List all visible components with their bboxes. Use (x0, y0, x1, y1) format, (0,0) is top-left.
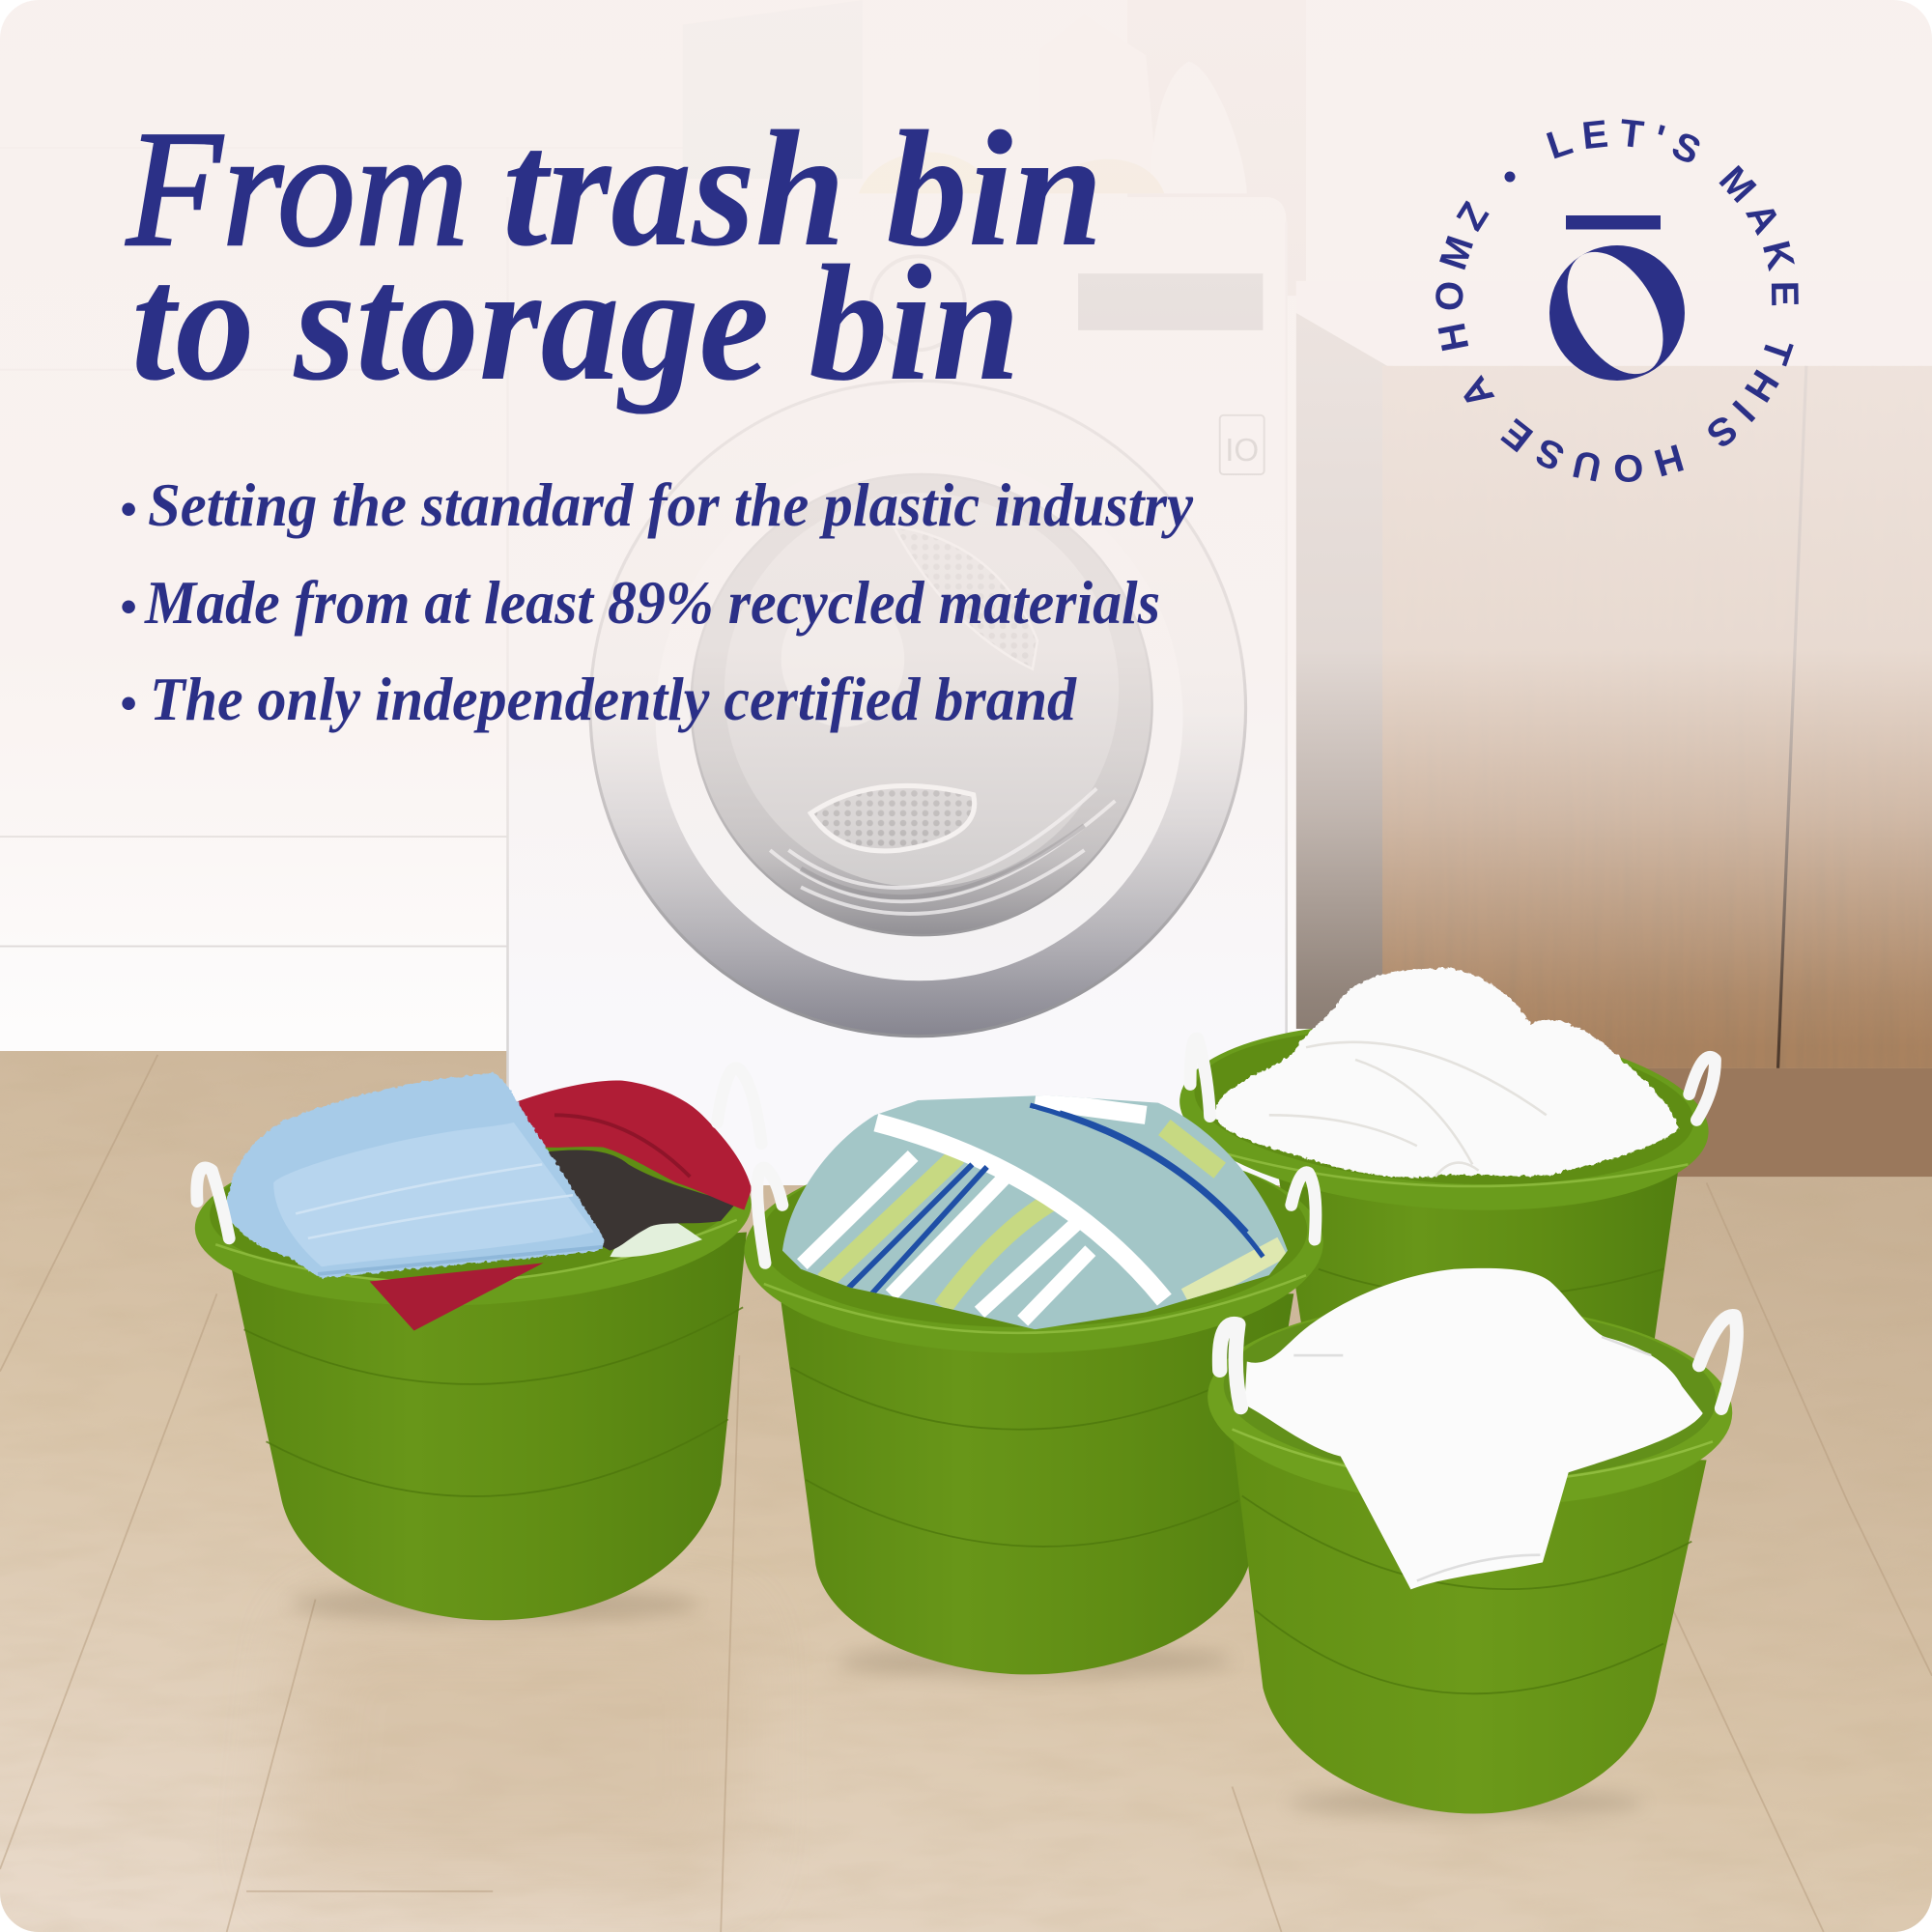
bin rim (743, 1136, 1325, 1358)
bin: front right with white cloth (1205, 1268, 1737, 1814)
floor grain (44, 1924, 72, 1932)
white cloth (1244, 1268, 1703, 1589)
lower drum paddle (810, 785, 975, 851)
drum hub (784, 678, 900, 726)
title: trash bin (502, 98, 1103, 281)
bin: left with blue towel and red cloth (191, 1068, 761, 1620)
bullet: recycled: Made from at least 89% recycled materials (144, 568, 1160, 637)
red cloth (514, 1081, 752, 1210)
rope handles (1190, 1038, 1210, 1117)
bullet: certified: • (120, 676, 137, 730)
slogan dot (1505, 172, 1515, 182)
logo letter o (1549, 245, 1685, 381)
striped towel (764, 1084, 1306, 1343)
control knob (871, 256, 965, 350)
cabinet side panel (1296, 313, 1387, 1029)
door white band (657, 733, 1182, 981)
bin body (232, 1233, 747, 1620)
dark cloth (543, 1151, 735, 1251)
logo macron (1566, 215, 1661, 230)
wall baseboard (0, 836, 506, 947)
drum glass reflections (770, 788, 1115, 914)
red flap (370, 1263, 543, 1331)
bin rim (191, 1115, 755, 1318)
bullet: standard: • (120, 482, 137, 536)
rope handles (757, 1168, 782, 1263)
wood cabinet (1382, 366, 1932, 1068)
floor (0, 1051, 1932, 1932)
blue towel (227, 1073, 604, 1278)
bin rim (1205, 1294, 1736, 1515)
washer body (508, 1051, 1280, 1185)
bin shadows (290, 1587, 1645, 1817)
floor planks (277, 1614, 739, 1886)
door glass and drum (692, 474, 1152, 935)
bin: back right with white towels (1174, 969, 1716, 1355)
bin: centre with striped towel (743, 1084, 1325, 1674)
washing machine (508, 197, 1287, 1185)
rope handles (717, 1068, 761, 1144)
ten-year badge (1220, 415, 1264, 474)
wall (0, 0, 1932, 1060)
title (126, 98, 1103, 415)
worktop (1296, 281, 1932, 366)
bullet: recycled: • (120, 580, 137, 634)
bullet list (120, 470, 1194, 733)
circular slogan: LET'S MAKE THIS HOUSE A HOMZ (1435, 119, 1799, 482)
mint cloth (610, 1219, 702, 1257)
upper drum paddle (912, 545, 1038, 670)
pale wash overlay (0, 0, 1932, 1047)
cabinet plinth (1647, 1068, 1932, 1177)
brand badge (1435, 119, 1799, 482)
rope handles (1219, 1323, 1240, 1407)
bin rim (1174, 1007, 1715, 1226)
bin body (1234, 1441, 1707, 1814)
display panel (1078, 273, 1263, 330)
bullet: standard: Setting the standard for the plastic industry (148, 470, 1194, 539)
bin body (780, 1293, 1293, 1674)
cabinet divider (1778, 366, 1806, 1068)
bin body (1278, 1171, 1678, 1355)
recess above washer (1289, 292, 1295, 296)
ten-year badge: IO (1225, 433, 1259, 469)
door silver ring (590, 381, 1246, 1037)
bullet: certified: The only independently certified brand (150, 665, 1077, 733)
title: to storage bin (131, 232, 1020, 415)
white towels (1213, 969, 1680, 1178)
title: From (126, 98, 469, 281)
shelf items above washer (860, 153, 1127, 193)
wood grain (1382, 366, 1932, 1068)
